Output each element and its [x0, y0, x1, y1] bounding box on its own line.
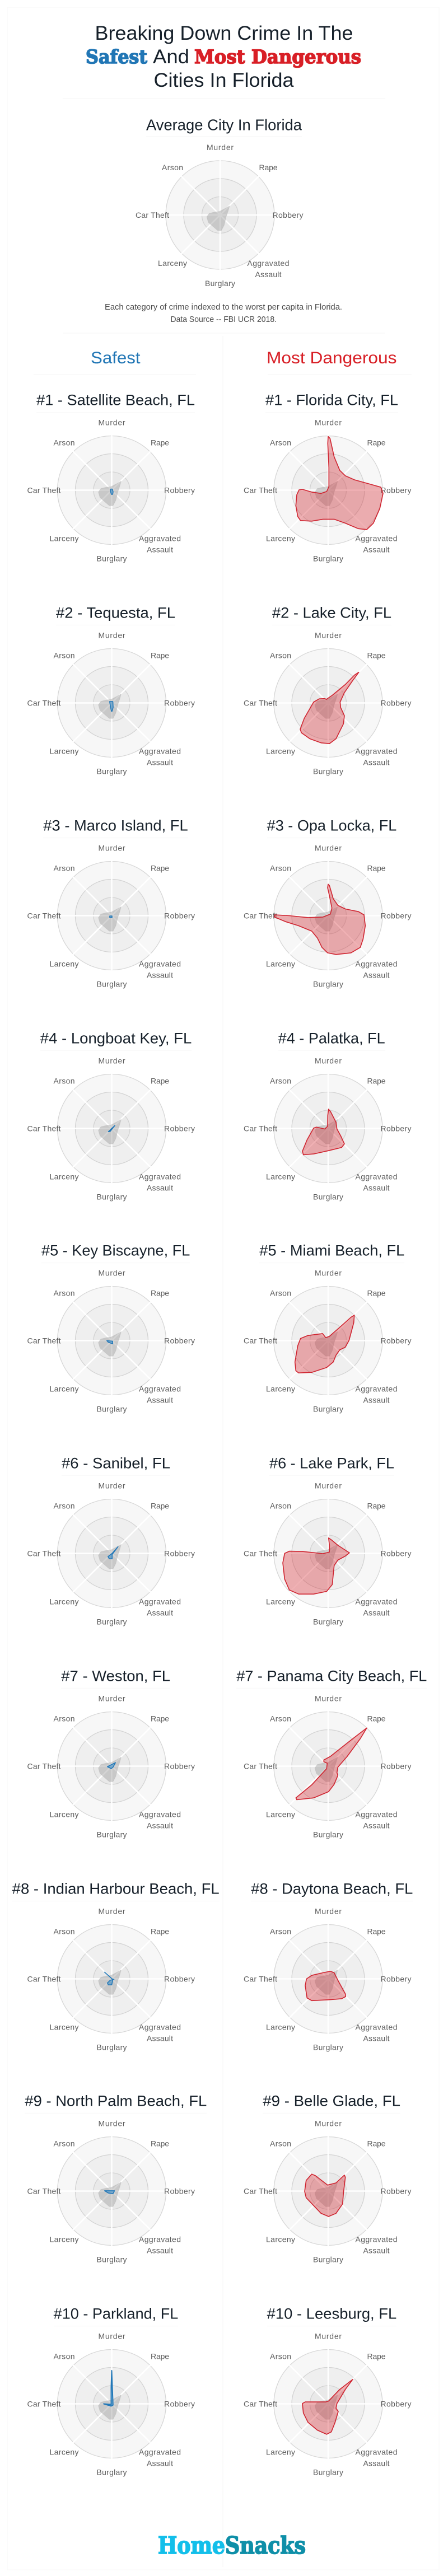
radar chart [27, 418, 195, 563]
heading: #2 - Lake City, FL [272, 605, 391, 621]
radar chart: Rape [151, 1076, 169, 1085]
radar chart [27, 1269, 195, 1413]
panel: dangerous 2 [244, 605, 411, 776]
radar chart: Arson [270, 1076, 291, 1085]
radar chart: Robbery [381, 1974, 411, 1983]
radar chart: Murder [99, 1269, 125, 1278]
radar chart: Burglary [96, 1193, 127, 1201]
radar chart: Arson [54, 1076, 75, 1085]
radar chart: Aggravated [355, 1384, 398, 1393]
column heading: most dangerous: Most Dangerous [267, 349, 396, 367]
title: Safest [86, 46, 147, 68]
radar chart: Burglary [96, 1830, 127, 1839]
radar chart: Assault [147, 1608, 173, 1617]
logo: HomeSnacks: Snacks [225, 2532, 306, 2559]
radar chart: Assault [147, 758, 173, 767]
radar chart: Car Theft [27, 911, 61, 920]
radar chart: average city: Aggravated [248, 259, 289, 268]
radar chart [244, 2119, 411, 2264]
radar chart: Larceny [266, 534, 295, 543]
radar chart [27, 1481, 195, 1626]
panel: dangerous 9 [244, 2093, 411, 2264]
radar chart: Rape [367, 651, 386, 660]
radar chart [27, 1907, 195, 2051]
radar chart: average city [136, 143, 304, 288]
title [86, 22, 361, 91]
radar chart: Larceny [49, 2022, 78, 2031]
radar chart [244, 1907, 411, 2051]
radar chart: Larceny [266, 1384, 295, 1393]
heading: #2 - Tequesta, FL [56, 605, 175, 621]
radar chart: Burglary [313, 1404, 343, 1413]
radar chart [244, 630, 411, 776]
radar chart: Larceny [49, 1172, 78, 1181]
radar chart: Murder [315, 2331, 342, 2340]
heading: #8 - Daytona Beach, FL [251, 1880, 413, 1897]
radar chart: Larceny [266, 2448, 295, 2457]
radar chart: Aggravated [355, 1810, 398, 1818]
radar chart: Larceny [266, 960, 295, 969]
radar chart: Larceny [49, 1597, 78, 1606]
radar chart: Murder [315, 1694, 342, 1703]
radar chart: Aggravated [139, 747, 181, 756]
radar chart: Larceny [266, 1597, 295, 1606]
radar chart: Arson [54, 1927, 75, 1936]
radar chart: Rape [367, 2351, 386, 2360]
radar chart: Assault [363, 2246, 390, 2255]
radar chart: Rape [367, 438, 386, 447]
radar chart [27, 630, 195, 776]
radar chart: Burglary [96, 1617, 127, 1626]
radar chart [244, 418, 411, 563]
radar chart: Murder [99, 418, 125, 427]
radar chart: Assault [363, 1184, 390, 1193]
logo: HomeSnacks [158, 2532, 306, 2559]
radar chart: Burglary [313, 767, 343, 776]
radar chart [244, 1481, 411, 1626]
radar chart: Assault [147, 1821, 173, 1830]
heading: #3 - Marco Island, FL [43, 817, 188, 834]
panel: dangerous 5 [244, 1242, 411, 1413]
radar chart: Rape [151, 1289, 169, 1298]
radar chart: Burglary [313, 2468, 343, 2477]
radar chart: average city: Arson [162, 163, 183, 172]
radar chart: Assault [363, 971, 390, 980]
radar chart: Robbery [164, 1336, 195, 1345]
radar chart: Burglary [96, 1404, 127, 1413]
radar chart: Robbery [381, 1549, 411, 1558]
radar chart: Robbery [381, 699, 411, 708]
radar chart: Aggravated [355, 1597, 398, 1606]
panel: dangerous 10 [244, 2306, 411, 2477]
radar chart: Assault [147, 2246, 173, 2255]
radar chart: Aggravated [139, 1810, 181, 1818]
radar chart: Rape [151, 863, 169, 872]
radar chart: Robbery [381, 2400, 411, 2409]
radar chart: average city: Murder [207, 143, 234, 152]
radar chart: Aggravated [355, 2022, 398, 2031]
radar chart: Arson [54, 2139, 75, 2148]
logo: HomeSnacks: Home [158, 2532, 225, 2559]
radar chart: Assault [147, 1395, 173, 1404]
radar chart: Larceny [49, 747, 78, 756]
radar chart: Car Theft [244, 699, 277, 708]
radar chart: Arson [270, 863, 291, 872]
heading: #5 - Miami Beach, FL [259, 1242, 404, 1259]
radar chart: Rape [367, 1714, 386, 1723]
radar chart: Rape [151, 1502, 169, 1511]
radar chart: Arson [270, 1714, 291, 1723]
radar chart: Murder [99, 1056, 125, 1065]
title: Cities In Florida [153, 69, 294, 91]
radar chart: Aggravated [139, 960, 181, 969]
radar chart: Arson [270, 2139, 291, 2148]
radar chart: Car Theft [27, 2187, 61, 2196]
radar chart: Burglary [313, 980, 343, 989]
radar chart: average city: Car Theft [136, 211, 169, 219]
radar chart: Larceny [49, 534, 78, 543]
source note: Each category of crime indexed to the worst per capita in Florida. [105, 302, 342, 312]
title: Most Dangerous [194, 46, 361, 68]
radar chart: Murder [315, 1907, 342, 1916]
radar chart: Burglary [313, 1830, 343, 1839]
radar chart: Assault [363, 545, 390, 554]
radar chart: Robbery [381, 1124, 411, 1133]
radar chart: Assault [363, 1395, 390, 1404]
radar chart: Assault [363, 758, 390, 767]
radar chart: Murder [99, 1694, 125, 1703]
radar chart: Murder [315, 418, 342, 427]
radar chart: Assault [363, 2033, 390, 2042]
radar chart: Aggravated [139, 2448, 181, 2457]
radar chart: Car Theft [244, 1974, 277, 1983]
radar chart: Murder [99, 630, 125, 639]
panel: safest 8 [12, 1880, 220, 2051]
heading: #3 - Opa Locka, FL [267, 817, 396, 834]
panel: dangerous 8 [244, 1880, 413, 2051]
radar chart: Robbery [381, 486, 411, 495]
radar chart: Burglary [96, 2468, 127, 2477]
radar chart: Robbery [164, 1124, 195, 1133]
radar chart: Car Theft [244, 2187, 277, 2196]
radar chart [27, 1056, 195, 1201]
radar chart: Rape [367, 2139, 386, 2148]
radar chart: Assault [147, 2033, 173, 2042]
radar chart [244, 1694, 411, 1839]
radar chart: Rape [367, 1076, 386, 1085]
radar chart: Rape [151, 651, 169, 660]
radar chart: Murder [315, 1269, 342, 1278]
radar chart: Murder [99, 843, 125, 852]
source note: Data Source -- FBI UCR 2018. [170, 315, 277, 324]
radar chart: Aggravated [139, 2235, 181, 2244]
radar chart: Rape [151, 1714, 169, 1723]
radar chart: Robbery [381, 1761, 411, 1770]
radar chart: Arson [54, 1502, 75, 1511]
radar chart: Assault [147, 971, 173, 980]
radar chart: Burglary [96, 2255, 127, 2264]
radar chart: Assault [363, 1608, 390, 1617]
radar chart [27, 2119, 195, 2264]
radar chart: average city: Assault [255, 270, 282, 279]
radar chart: Car Theft [244, 1124, 277, 1133]
radar chart: Aggravated [355, 2448, 398, 2457]
panel: dangerous 4 [244, 1030, 411, 1201]
radar chart: Arson [54, 2351, 75, 2360]
radar chart: Larceny [266, 2022, 295, 2031]
radar chart: Assault [363, 1821, 390, 1830]
title: Breaking Down Crime In The [95, 22, 353, 44]
radar chart: Car Theft [27, 1336, 61, 1345]
radar chart: Rape [367, 1927, 386, 1936]
radar chart: Burglary [96, 767, 127, 776]
radar chart [244, 1269, 411, 1413]
heading: #6 - Sanibel, FL [62, 1455, 170, 1471]
radar chart: Murder [315, 630, 342, 639]
radar chart: Rape [151, 438, 169, 447]
radar chart: Robbery [164, 1761, 195, 1770]
radar chart: Assault [147, 2459, 173, 2468]
radar chart: Aggravated [139, 1384, 181, 1393]
radar chart: Aggravated [355, 1172, 398, 1181]
radar chart: Robbery [164, 1974, 195, 1983]
heading: #10 - Leesburg, FL [267, 2306, 396, 2322]
radar chart: Murder [99, 2119, 125, 2128]
panel: safest 7 [27, 1667, 195, 1839]
radar chart: Assault [363, 2459, 390, 2468]
panel: safest 9 [25, 2093, 207, 2264]
radar chart: Murder [99, 1907, 125, 1916]
radar chart: Murder [315, 1481, 342, 1490]
radar chart: Aggravated [355, 534, 398, 543]
radar chart: Larceny [49, 960, 78, 969]
radar chart: Car Theft [27, 1549, 61, 1558]
radar chart: Arson [54, 1289, 75, 1298]
radar chart: Assault [147, 1184, 173, 1193]
radar chart: Car Theft [27, 2400, 61, 2409]
panel: dangerous 3 [244, 817, 411, 989]
radar chart: Larceny [49, 1810, 78, 1818]
radar chart: Rape [367, 1502, 386, 1511]
radar chart: Rape [151, 1927, 169, 1936]
radar chart [27, 843, 195, 989]
heading: #7 - Panama City Beach, FL [236, 1667, 427, 1684]
heading: #8 - Indian Harbour Beach, FL [12, 1880, 220, 1897]
radar chart: Arson [270, 2351, 291, 2360]
radar chart: Larceny [266, 1172, 295, 1181]
radar chart: Robbery [164, 911, 195, 920]
radar chart: Rape [367, 863, 386, 872]
radar chart: Car Theft [27, 486, 61, 495]
radar chart: Robbery [381, 1336, 411, 1345]
radar chart: Assault [147, 545, 173, 554]
radar chart: Aggravated [139, 1597, 181, 1606]
radar chart: Larceny [266, 747, 295, 756]
heading: #7 - Weston, FL [61, 1667, 170, 1684]
radar chart: Car Theft [244, 1549, 277, 1558]
heading: #9 - Belle Glade, FL [263, 2093, 400, 2110]
radar chart: Aggravated [355, 2235, 398, 2244]
radar chart [27, 2331, 195, 2477]
radar chart: Burglary [313, 2042, 343, 2051]
radar chart: Car Theft [244, 911, 277, 920]
radar chart: Aggravated [355, 747, 398, 756]
radar chart: Murder [315, 1056, 342, 1065]
radar chart: Car Theft [244, 2400, 277, 2409]
radar chart: Robbery [381, 911, 411, 920]
radar chart: Larceny [49, 2448, 78, 2457]
radar chart: Arson [270, 651, 291, 660]
radar chart: Arson [54, 1714, 75, 1723]
radar chart: Larceny [49, 2235, 78, 2244]
panel: safest 10 [27, 2306, 195, 2477]
source note [105, 302, 342, 324]
radar chart: Rape [151, 2351, 169, 2360]
panel: dangerous 7 [236, 1667, 427, 1839]
radar chart: Car Theft [27, 699, 61, 708]
panel: safest 1 [27, 392, 195, 563]
radar chart: Car Theft [27, 1124, 61, 1133]
radar chart: Murder [315, 843, 342, 852]
radar chart: Larceny [266, 1810, 295, 1818]
radar chart [244, 1056, 411, 1201]
radar chart: Robbery [164, 699, 195, 708]
radar chart: Arson [54, 863, 75, 872]
radar chart: average city: Burglary [205, 279, 235, 288]
heading: #1 - Florida City, FL [265, 392, 398, 409]
radar chart: Robbery [164, 2400, 195, 2409]
radar chart: Aggravated [139, 1172, 181, 1181]
radar chart: Aggravated [355, 960, 398, 969]
radar chart: average city: Larceny [158, 259, 187, 268]
radar chart: Rape [367, 1289, 386, 1298]
panel: safest 3 [27, 817, 195, 989]
radar chart: Car Theft [27, 1974, 61, 1983]
heading: #4 - Palatka, FL [278, 1030, 385, 1047]
radar chart: Burglary [313, 1617, 343, 1626]
panel: safest 5 [27, 1242, 195, 1413]
radar chart: Burglary [96, 2042, 127, 2051]
radar chart: Rape [151, 2139, 169, 2148]
panel: dangerous 6 [244, 1455, 411, 1626]
radar chart: Larceny [266, 2235, 295, 2244]
radar chart: Car Theft [244, 1761, 277, 1770]
title: And [153, 46, 189, 68]
radar chart: Arson [270, 1289, 291, 1298]
radar chart: Aggravated [139, 2022, 181, 2031]
radar chart: Arson [54, 651, 75, 660]
radar chart: Arson [270, 1502, 291, 1511]
radar chart: Burglary [96, 554, 127, 563]
column heading: safest: Safest [91, 349, 141, 367]
panel: dangerous 1 [244, 392, 411, 563]
panel: safest 6 [27, 1455, 195, 1626]
radar chart: Robbery [164, 1549, 195, 1558]
radar chart: Robbery [164, 2187, 195, 2196]
radar chart: Murder [315, 2119, 342, 2128]
heading: #4 - Longboat Key, FL [40, 1030, 192, 1047]
heading: average city: Average City In Florida [146, 116, 302, 133]
heading: #6 - Lake Park, FL [269, 1455, 394, 1471]
radar chart: Arson [270, 1927, 291, 1936]
radar chart: Arson [54, 438, 75, 447]
radar chart [27, 1694, 195, 1839]
radar chart [244, 2331, 411, 2477]
radar chart: Robbery [381, 2187, 411, 2196]
panel: safest 4 [27, 1030, 195, 1201]
radar chart: Aggravated [139, 534, 181, 543]
radar chart: Car Theft [27, 1761, 61, 1770]
radar chart: Burglary [96, 980, 127, 989]
radar chart: Burglary [313, 2255, 343, 2264]
radar chart: Burglary [313, 554, 343, 563]
radar chart: Car Theft [244, 486, 277, 495]
radar chart: Robbery [164, 486, 195, 495]
radar chart: Murder [99, 1481, 125, 1490]
radar chart: Larceny [49, 1384, 78, 1393]
radar chart: Murder [99, 2331, 125, 2340]
radar chart: average city: Robbery [272, 211, 304, 219]
panel: safest 2 [27, 605, 195, 776]
radar chart: Car Theft [244, 1336, 277, 1345]
radar chart: Burglary [313, 1193, 343, 1201]
radar chart: average city: Rape [259, 163, 278, 172]
heading: #1 - Satellite Beach, FL [36, 392, 195, 409]
radar chart: Arson [270, 438, 291, 447]
heading: #10 - Parkland, FL [54, 2306, 178, 2322]
radar chart [244, 843, 411, 989]
heading: #5 - Key Biscayne, FL [41, 1242, 190, 1259]
heading: #9 - North Palm Beach, FL [25, 2093, 207, 2110]
